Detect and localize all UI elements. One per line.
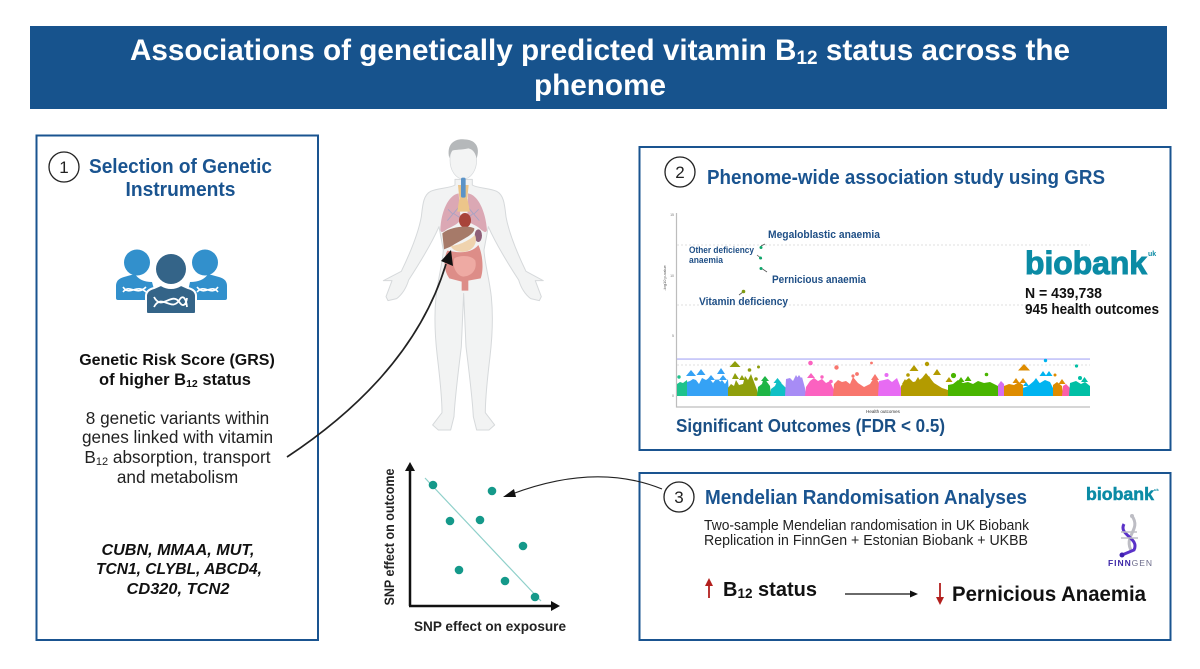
arrow: MR to scatter [503, 477, 662, 497]
manhattan plot [662, 213, 1090, 414]
variants description: absorption, transport [108, 447, 271, 467]
gene list: TCN1, CLYBL, ABCD4, [96, 561, 262, 578]
significant outcomes: Significant Outcomes (FDR < 0.5) [676, 416, 945, 436]
MR description: Two-sample Mendelian randomisation in UK Biobank [704, 518, 1030, 534]
scatter plot [381, 462, 566, 634]
intestines [445, 245, 483, 291]
GRS text [79, 352, 275, 390]
hit labels: Megaloblastic anaemia [768, 229, 881, 241]
head [450, 141, 477, 179]
title banner: Associations of genetically predicted vitamin B [130, 34, 796, 67]
small biobank logo: uk [1154, 487, 1159, 492]
panel 1 heading: Selection of Genetic [89, 156, 272, 178]
spleen [475, 229, 482, 242]
arrow: GRS to body [287, 250, 453, 457]
GRS text: of higher B [99, 371, 186, 389]
FinnGen logo [1108, 514, 1152, 568]
hit labels [689, 229, 881, 308]
arrow: exposure to outcome [845, 590, 918, 598]
MR description: Replication in FinnGen + Estonian Biobank + UKBB [704, 533, 1028, 549]
panel 3: mendelian randomisation [640, 473, 1170, 640]
manhattan plot: 15 [670, 213, 674, 217]
variants description: B [84, 447, 96, 467]
outcome markers [677, 359, 1088, 386]
manhattan plot: 0 [672, 394, 674, 398]
liver [442, 227, 474, 249]
title banner [30, 26, 1167, 109]
GRS text: 12 [186, 378, 198, 390]
variants description: 12 [96, 456, 108, 468]
GRS text: Genetic Risk Score (GRS) [79, 352, 275, 369]
small biobank logo: biobank [1086, 484, 1154, 504]
manhattan plot: Health outcomes [866, 409, 901, 414]
sample size [1025, 285, 1159, 318]
association bands [677, 380, 688, 396]
scatter plot: SNP effect on outcome [381, 468, 397, 606]
step number 3 [664, 482, 694, 512]
heart [459, 213, 471, 228]
step number 2 [665, 157, 695, 187]
gene list: CD320, TCN2 [126, 581, 230, 598]
variants description [82, 408, 273, 487]
hit labels: anaemia [689, 255, 724, 265]
MR description [704, 518, 1030, 549]
step number 3: 3 [674, 488, 684, 507]
hit labels: Vitamin deficiency [699, 296, 789, 308]
panel 1 heading [89, 156, 272, 201]
UK biobank logo: biobank [1025, 245, 1147, 281]
step number 1 [49, 152, 79, 182]
decreased pernicious anaemia: Pernicious Anaemia [952, 582, 1147, 606]
panel 1 heading: Instruments [126, 179, 236, 201]
sample size: N = 439,738 [1025, 285, 1102, 302]
variants description: genes linked with vitamin [82, 427, 273, 447]
scatter plot: SNP effect on exposure [414, 618, 566, 634]
manhattan plot: -log10 p-value [662, 265, 667, 291]
increased B12 status: B [723, 579, 737, 601]
sample size: 945 health outcomes [1025, 301, 1159, 318]
manhattan plot: 10 [670, 274, 674, 278]
panel 2 heading: Phenome-wide association study using GRS [707, 167, 1105, 189]
icon: people with DNA [116, 250, 227, 314]
hit labels: Pernicious anaemia [772, 274, 867, 286]
panel 3 heading: Mendelian Randomisation Analyses [705, 487, 1027, 509]
title banner: status across the [818, 34, 1070, 67]
panel 1: selection of genetic instruments [36, 136, 318, 640]
throat and trachea [457, 185, 470, 212]
stomach [451, 235, 476, 252]
human body with organs [383, 139, 543, 430]
gene list: CUBN, MMAA, MUT, [102, 542, 254, 559]
increased B12 status [705, 578, 817, 601]
title banner: 12 [796, 48, 818, 69]
UK biobank logo: uk [1148, 251, 1156, 258]
step number 1: 1 [59, 158, 69, 177]
increased B12 status: 12 [737, 586, 752, 601]
FinnGen logo: FINNGEN [1108, 558, 1152, 568]
top hits [739, 244, 767, 295]
body outline [383, 179, 543, 430]
step number 2: 2 [675, 163, 685, 182]
panel 2: phenome-wide association study [640, 147, 1170, 450]
hit labels: Other deficiency [689, 245, 754, 255]
variants description: 8 genetic variants within [86, 408, 269, 428]
title banner: phenome [534, 69, 666, 102]
manhattan plot: 5 [672, 334, 674, 338]
increased B12 status: status [752, 579, 817, 601]
GRS text: status [198, 371, 251, 389]
lungs [440, 193, 487, 232]
hair [449, 139, 478, 158]
variants description: and metabolism [117, 467, 238, 487]
gene list [96, 542, 262, 598]
